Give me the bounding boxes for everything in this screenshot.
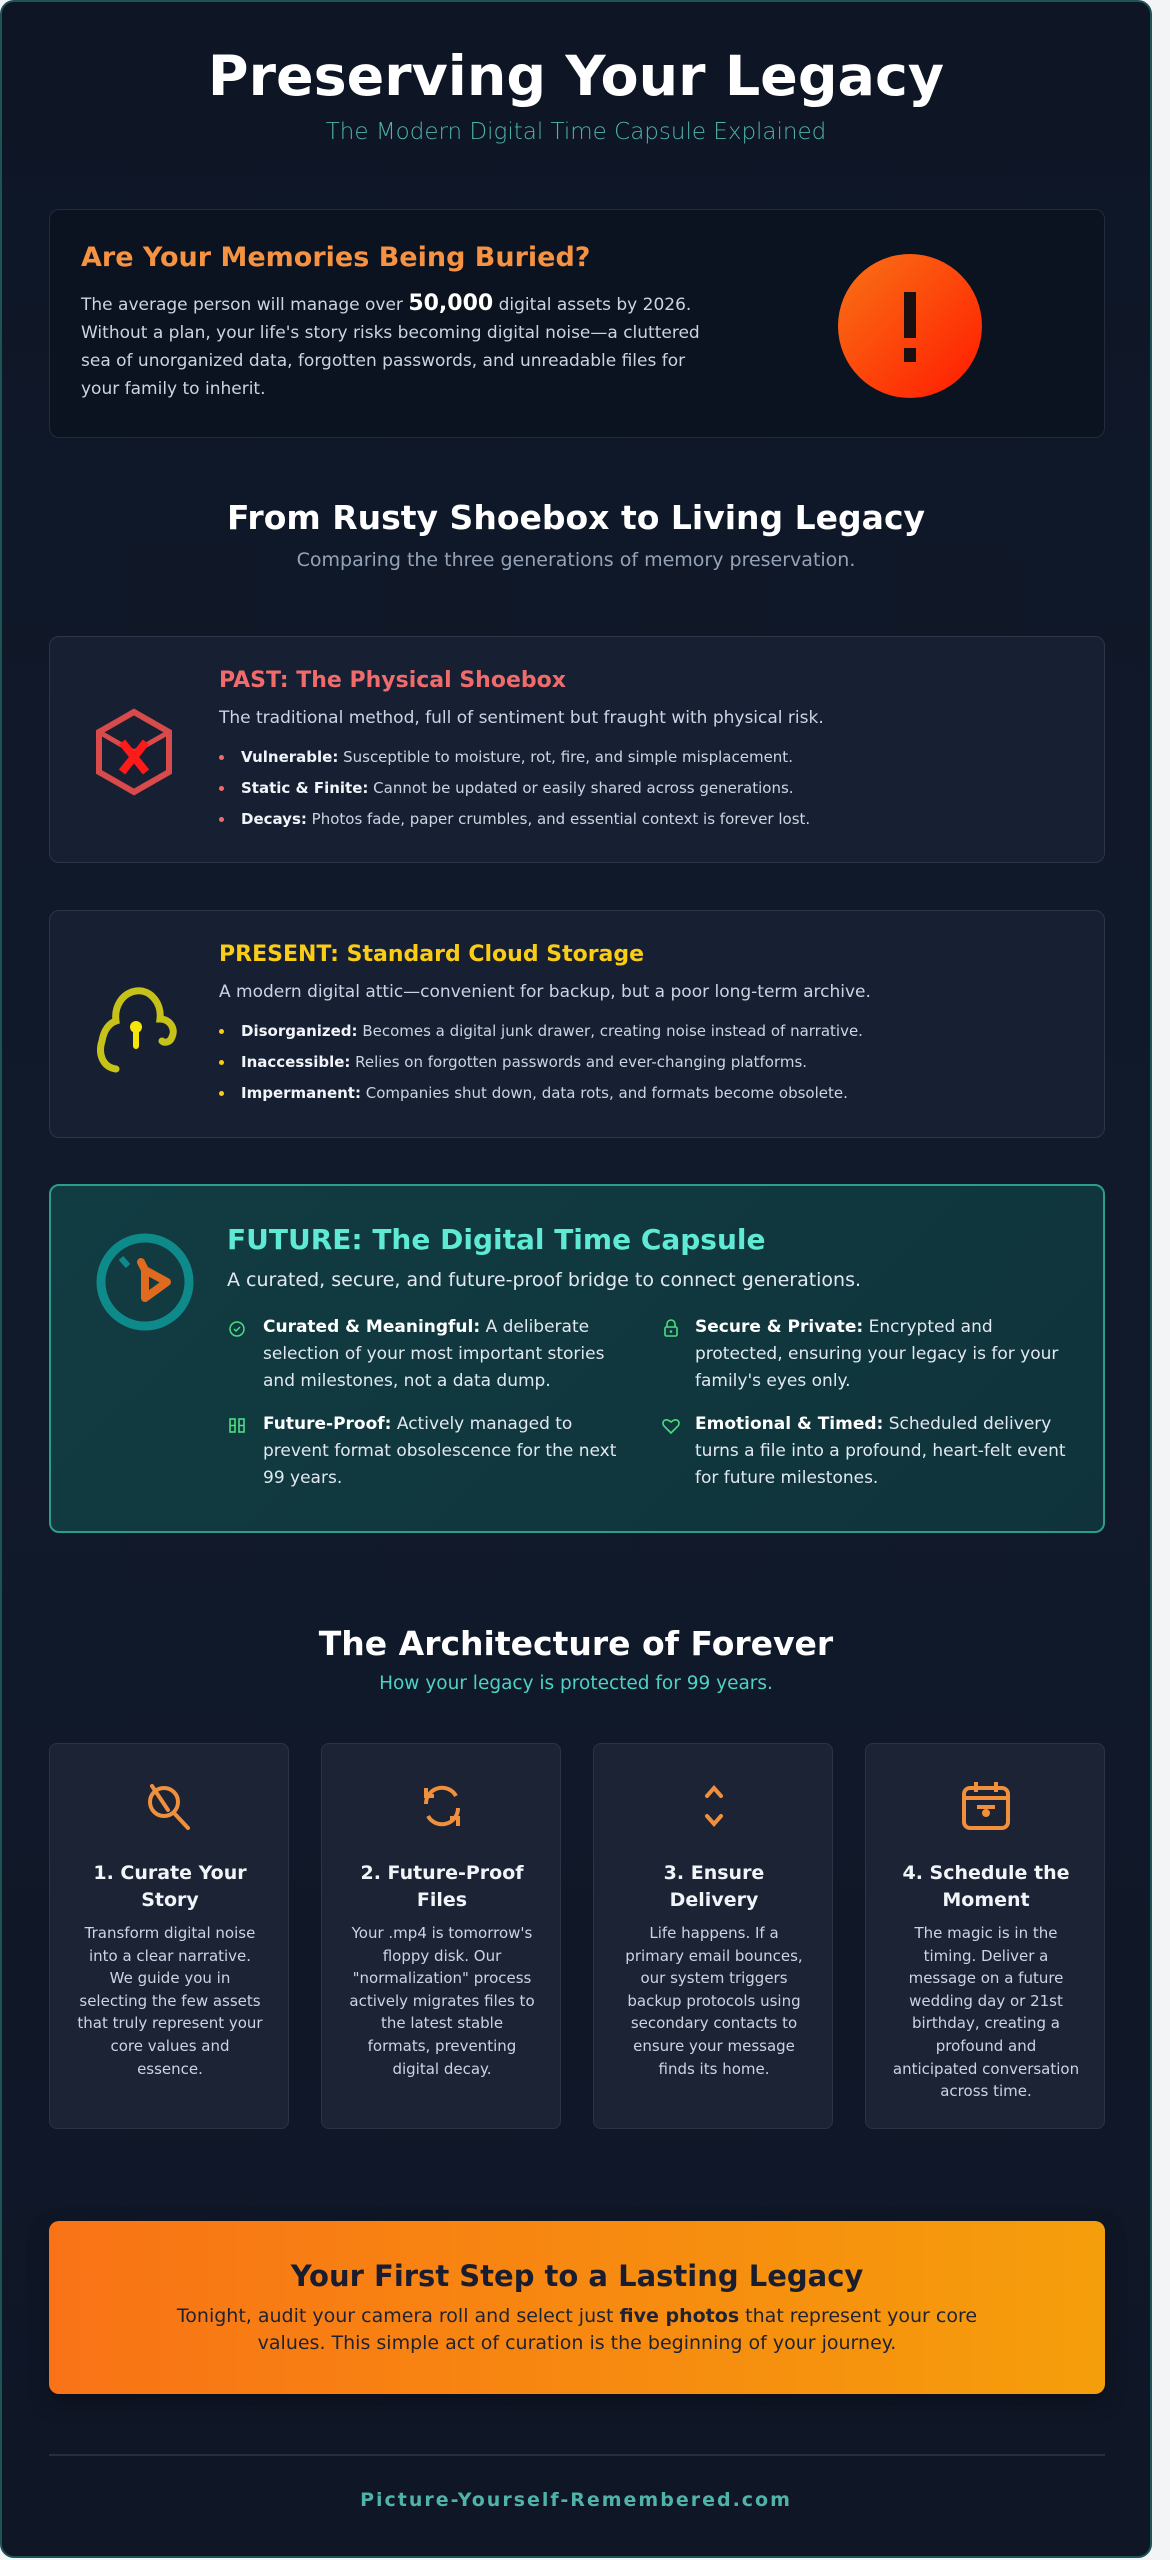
present bullets: Impermanent: Companies shut down, data rots, and formats become obsolete.	[241, 1084, 848, 1102]
card: schedule: message on a future	[909, 1969, 1063, 1987]
title: Preserving Your Legacy	[208, 44, 944, 109]
present bullets: Inaccessible: Relies on forgotten passwords and ever-changing platforms.	[241, 1053, 807, 1071]
panel: call to action	[49, 2221, 1105, 2394]
alert text: The average person will manage over 50,000 digital assets by 2026. Without a plan, your life's story risks becoming digital noise—a cluttered sea of unorganized data, forgotten passwords, and unreadable files for your family to inherit.	[81, 291, 700, 399]
present title: PRESENT: Standard Cloud Storage	[219, 942, 644, 967]
card: future-proof	[321, 1743, 561, 2129]
card: schedule: The magic is in the	[914, 1924, 1057, 1942]
icon: cloud lock	[96, 987, 177, 1072]
card: schedule: profound and	[936, 2037, 1036, 2055]
footer: Picture-Yourself-Remembered.com	[360, 2489, 792, 2511]
card: curate: Transform digital noise into a clear narrative. We guide you in selecting the few assets that truly represent your core values and essence.	[77, 1924, 263, 2078]
card: future-proof: Your .mp4 is tomorrow's floppy disk. Our "normalization" process actively migrates files to the latest stable formats, preventing digital decay.	[349, 1924, 535, 2078]
icon: time capsule	[96, 1234, 194, 1330]
panel: past	[49, 636, 1105, 863]
icon: refresh	[424, 1786, 460, 1826]
feature: curated: Curated & Meaningful: A deliberate selection of your most important stories and milestones, not a data dump.	[263, 1317, 604, 1391]
card: delivery: 3. Ensure Delivery	[664, 1862, 764, 1911]
card: curate	[49, 1743, 289, 2129]
future title: FUTURE: The Digital Time Capsule	[227, 1223, 766, 1256]
panel: future	[49, 1184, 1105, 1533]
section subtitle: Comparing the three generations of memory preservation.	[297, 549, 855, 571]
panel: alert	[49, 209, 1105, 438]
card: schedule: 4. Schedule the Moment	[902, 1862, 1070, 1911]
past bullets: Vulnerable: Susceptible to moisture, rot, fire, and simple misplacement.	[241, 748, 793, 766]
section heading: architecture: The Architecture of Forever	[319, 1624, 833, 1663]
icon: chevrons	[704, 1785, 724, 1827]
icon: alert	[838, 254, 982, 398]
cta text: Tonight, audit your camera roll and select just five photos that represent your core values. This simple act of curation is the beginning of your journey.	[177, 2305, 977, 2354]
card: schedule: wedding day or 21st	[909, 1992, 1063, 2010]
card: schedule: anticipated conversation	[893, 2060, 1079, 2078]
past description: The traditional method, full of sentiment but fraught with physical risk.	[219, 708, 824, 728]
past bullets: Static & Finite: Cannot be updated or easily shared across generations.	[241, 779, 794, 797]
card: schedule: across time.	[940, 2082, 1032, 2100]
section subtitle: How your legacy is protected for 99 years.	[379, 1673, 773, 1694]
card: future-proof: 2. Future-Proof Files	[360, 1862, 524, 1911]
present description: A modern digital attic—convenient for backup, but a poor long-term archive.	[219, 982, 871, 1002]
card: schedule	[865, 1743, 1105, 2129]
panel: present	[49, 910, 1105, 1138]
card: schedule: birthday, creating a	[912, 2014, 1060, 2032]
present bullets: Disorganized: Becomes a digital junk drawer, creating noise instead of narrative.	[241, 1022, 863, 1040]
present bullets	[219, 1022, 863, 1102]
feature: secure: Secure & Private: Encrypted and protected, ensuring your legacy is for your family's eyes only.	[695, 1317, 1058, 1391]
card: delivery	[593, 1743, 833, 2129]
icon: broken box	[96, 708, 172, 796]
alert heading: Are Your Memories Being Buried?	[81, 242, 590, 273]
past bullets: Decays: Photos fade, paper crumbles, and essential context is forever lost.	[241, 810, 810, 828]
card: schedule: timing. Deliver a	[924, 1947, 1048, 1965]
card: delivery: Life happens. If a primary email bounces, our system triggers backup protocols using secondary contacts to ensure your message finds its home.	[625, 1924, 803, 2078]
icon: calendar	[962, 1782, 1010, 1830]
section heading: comparison: From Rusty Shoebox to Living Legacy	[227, 498, 925, 537]
icon: search	[148, 1784, 190, 1830]
subtitle: The Modern Digital Time Capsule Explained	[326, 119, 826, 145]
future description: A curated, secure, and future-proof bridge to connect generations.	[227, 1269, 861, 1291]
feature: emotional: Emotional & Timed: Scheduled delivery turns a file into a profound, heart-felt event for future milestones.	[695, 1414, 1066, 1488]
card: curate: 1. Curate Your Story	[93, 1862, 247, 1911]
past bullets	[219, 748, 810, 828]
feature: future-proof: Future-Proof: Actively managed to prevent format obsolescence for the next 99 years.	[263, 1414, 616, 1488]
past title: PAST: The Physical Shoebox	[219, 668, 566, 693]
cta heading: Your First Step to a Lasting Legacy	[291, 2259, 863, 2293]
